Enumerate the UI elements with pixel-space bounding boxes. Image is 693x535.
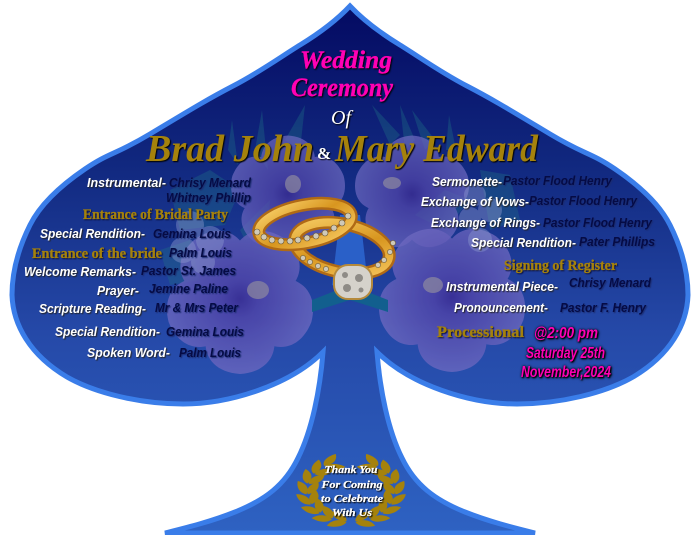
subtitle: Of: Of [331, 107, 353, 129]
date and time: November,2024 [521, 364, 611, 381]
program: left column: Welcome Remarks- [24, 265, 136, 279]
program: left column: Special Rendition- [55, 325, 160, 339]
program: left column: Prayer- [97, 284, 139, 298]
program: left column: Chrisy Menard [169, 176, 251, 190]
small white flowers [170, 184, 502, 274]
solitaire diamond [334, 265, 372, 299]
program: left column: Palm Louis [169, 246, 232, 260]
program: right column: Chrisy Menard [569, 276, 651, 290]
program: left column: Scripture Reading- [39, 302, 146, 316]
date and time [521, 325, 611, 381]
program: left column: Special Rendition- [40, 227, 145, 241]
icon: wedding rings [254, 196, 396, 299]
thank you message: to Celebrate [321, 493, 383, 505]
program: right column [421, 174, 655, 341]
teal leaves [160, 105, 520, 285]
laurel wreath [290, 450, 412, 531]
couple names: Brad John [145, 128, 314, 170]
program: right column: Pronouncement- [454, 301, 548, 315]
central emblem [312, 215, 388, 312]
thank you message: With Us [332, 507, 372, 519]
date and time: Saturday 25th [526, 345, 605, 362]
program: left column: Palm Louis [179, 346, 241, 360]
program: right column: Pater Phillips [579, 235, 655, 249]
program: left column: Gemina Louis [153, 227, 231, 241]
program: right column: Exchange of Rings- [431, 216, 540, 230]
flower: lower left [167, 230, 313, 374]
program: left column: Pastor St. James [141, 264, 236, 278]
program: left column [24, 176, 251, 360]
program: right column: Pastor F. Henry [560, 301, 647, 315]
program: right column: Sermonette- [432, 175, 502, 189]
heading: Entrance of Bridal Party: Entrance of Bridal Party [83, 207, 229, 223]
heading: Entrance of the bride: Entrance of the bride [32, 246, 163, 262]
program: right column: Exchange of Vows- [421, 195, 529, 209]
flower: upper left [231, 136, 345, 244]
ring diamonds [254, 213, 396, 272]
stamens [247, 175, 443, 299]
program: right column: Instrumental Piece- [446, 280, 558, 294]
program: right column: Special Rendition- [471, 236, 576, 250]
thank you message [320, 464, 383, 519]
title: Wedding Ceremony [291, 47, 393, 102]
program: left column: Gemina Louis [166, 325, 244, 339]
program: left column: Spoken Word- [87, 346, 170, 360]
flower: lower right [379, 229, 525, 372]
title: Wedding Ceremony: Ceremony [291, 73, 393, 102]
title: Wedding Ceremony: Wedding [300, 47, 392, 74]
thank you message: Thank You [324, 464, 378, 476]
heading: Processional: Processional [437, 324, 525, 341]
thank you message: For Coming [320, 479, 383, 491]
heading: Signing of Register: Signing of Register [504, 258, 618, 274]
program: left column: Mr & Mrs Peter [155, 301, 239, 315]
background floral decoration [160, 106, 525, 374]
flower: upper right [355, 136, 469, 248]
program: right column: Pastor Flood Henry [503, 174, 613, 188]
couple names [145, 128, 539, 170]
date and time: @2:00 pm [534, 325, 598, 342]
program: left column: Jemine Paline [149, 282, 228, 296]
couple names: & [317, 144, 331, 163]
program: right column: Pastor Flood Henry [543, 216, 653, 230]
program: left column: Instrumental- [87, 176, 166, 190]
program: left column: Whitney Phillip [166, 191, 251, 205]
couple names: Mary Edward [334, 128, 539, 170]
program: right column: Pastor Flood Henry [529, 194, 638, 208]
